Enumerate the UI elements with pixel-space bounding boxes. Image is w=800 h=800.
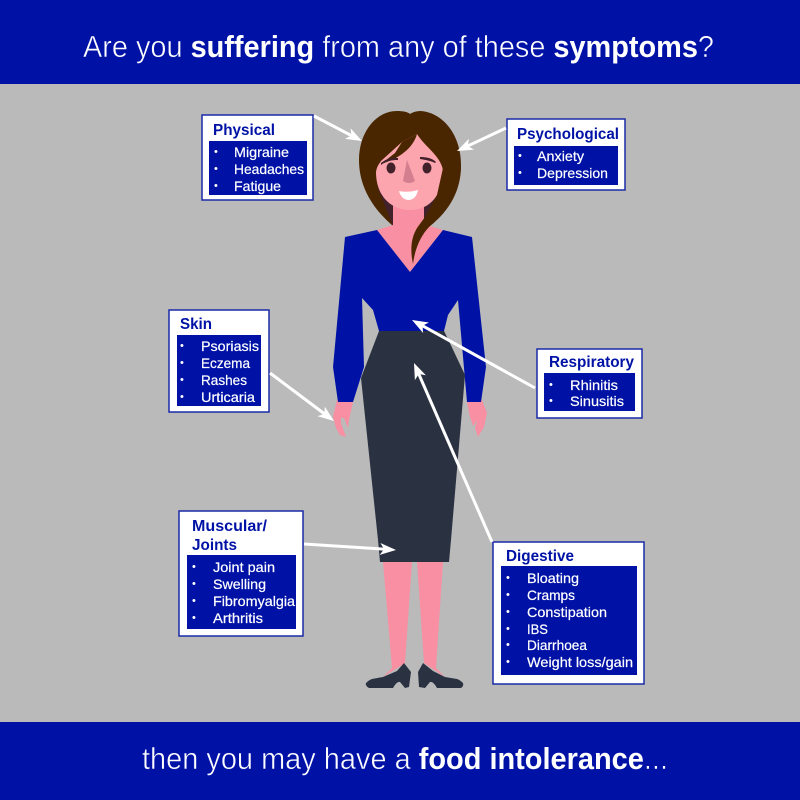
symptom list: respiratory: • bbox=[549, 379, 553, 391]
arrow: physical to head bbox=[314, 116, 365, 146]
symptom list: physical: • bbox=[214, 146, 218, 158]
symptom list: muscular joints: Joint pain bbox=[213, 559, 275, 575]
symptom list: digestive: • bbox=[506, 606, 510, 618]
symptom list: skin: • bbox=[180, 340, 184, 352]
panel: muscular joints bbox=[179, 511, 303, 636]
symptom list: digestive: • bbox=[506, 639, 510, 651]
symptom list: psychological: • bbox=[518, 150, 522, 162]
symptom list: digestive: Constipation bbox=[527, 604, 607, 620]
symptom list: respiratory: Sinusitis bbox=[570, 393, 624, 409]
panel: skin bbox=[169, 310, 269, 412]
symptom list: muscular joints: • bbox=[192, 612, 196, 624]
panel: digestive bbox=[493, 542, 644, 684]
symptom list: physical: • bbox=[214, 163, 218, 175]
symptom list: digestive: • bbox=[506, 623, 510, 635]
symptom list: digestive: Diarrhoea bbox=[527, 637, 587, 653]
heading: muscular joints: Joints bbox=[192, 537, 237, 554]
panel: physical bbox=[202, 115, 313, 200]
hair tail bbox=[411, 165, 461, 264]
symptom list: muscular joints: • bbox=[192, 578, 196, 590]
symptom list: physical: Migraine bbox=[234, 144, 289, 160]
symptom list: skin: • bbox=[180, 357, 184, 369]
symptom list: respiratory bbox=[549, 377, 624, 409]
smile bbox=[399, 190, 418, 200]
symptom list: psychological: • bbox=[518, 167, 522, 179]
heading: muscular joints bbox=[192, 518, 268, 554]
eyebrows bbox=[381, 157, 436, 165]
symptom list: respiratory: Rhinitis bbox=[570, 377, 618, 393]
symptom list: digestive: Cramps bbox=[527, 587, 575, 603]
symptom list: digestive bbox=[506, 570, 633, 670]
symptom list: muscular joints: • bbox=[192, 595, 196, 607]
symptom list: psychological: Anxiety bbox=[537, 148, 584, 164]
symptom list: muscular joints: Fibromyalgia bbox=[213, 593, 295, 609]
face bbox=[376, 134, 443, 210]
hair shadow bbox=[377, 186, 441, 226]
woman figure bbox=[333, 111, 487, 688]
symptom list: muscular joints: Arthritis bbox=[213, 610, 263, 626]
panel: respiratory bbox=[537, 349, 642, 418]
symptom list: digestive: • bbox=[506, 589, 510, 601]
hair fringe bbox=[381, 134, 417, 164]
symptom list: physical: • bbox=[214, 180, 218, 192]
symptom list: skin: • bbox=[180, 374, 184, 386]
symptom list: skin: • bbox=[180, 391, 184, 403]
skirt bbox=[361, 331, 465, 562]
heading: respiratory: Respiratory bbox=[549, 354, 634, 371]
arrow: muscular to thigh bbox=[304, 543, 396, 556]
symptom list: digestive: Bloating bbox=[527, 570, 579, 586]
arrow: respiratory to chest bbox=[409, 315, 535, 388]
hair back bbox=[359, 111, 461, 226]
closing message: then you may have a food intolerance... bbox=[142, 741, 668, 776]
hands bbox=[333, 400, 487, 437]
shoes bbox=[366, 663, 463, 688]
symptom list: respiratory: • bbox=[549, 395, 553, 407]
symptom list: physical bbox=[214, 144, 304, 194]
heading: digestive: Digestive bbox=[506, 548, 574, 565]
symptom list: skin: Rashes bbox=[201, 372, 247, 388]
footer banner bbox=[0, 722, 800, 800]
header banner bbox=[0, 0, 800, 84]
heading: psychological: Psychological bbox=[517, 126, 619, 143]
symptom list: digestive: • bbox=[506, 656, 510, 668]
blouse bbox=[333, 230, 486, 402]
symptom list: skin: Psoriasis bbox=[201, 338, 259, 354]
symptom list: muscular joints bbox=[192, 559, 295, 626]
heading: physical: Physical bbox=[213, 122, 275, 139]
symptom list: physical: Headaches bbox=[234, 161, 304, 177]
neck and chest bbox=[377, 205, 443, 272]
symptom list: muscular joints: Swelling bbox=[213, 576, 266, 592]
nose bbox=[403, 160, 415, 183]
arrow: psychological to head bbox=[454, 128, 506, 156]
arrow: digestive to abdomen bbox=[408, 361, 492, 542]
symptom list: psychological: Depression bbox=[537, 165, 608, 181]
symptom list: digestive: IBS bbox=[527, 621, 548, 637]
symptom list: skin: Urticaria bbox=[201, 389, 255, 405]
symptom list: muscular joints: • bbox=[192, 561, 196, 573]
symptom list: skin: Eczema bbox=[201, 355, 250, 371]
symptom list: digestive: • bbox=[506, 572, 510, 584]
heading: muscular joints: Muscular/ bbox=[192, 518, 268, 535]
eyes bbox=[386, 162, 432, 174]
heading: skin: Skin bbox=[180, 316, 212, 333]
symptom list: physical: Fatigue bbox=[234, 178, 281, 194]
arrow: skin to hand bbox=[270, 373, 338, 426]
symptom list: skin bbox=[180, 338, 259, 405]
legs bbox=[383, 562, 445, 677]
title: Are you suffering from any of these symptoms? bbox=[83, 29, 714, 64]
symptom list: psychological bbox=[518, 148, 608, 181]
symptom list: digestive: Weight loss/gain bbox=[527, 654, 633, 670]
panel: psychological bbox=[507, 119, 625, 190]
